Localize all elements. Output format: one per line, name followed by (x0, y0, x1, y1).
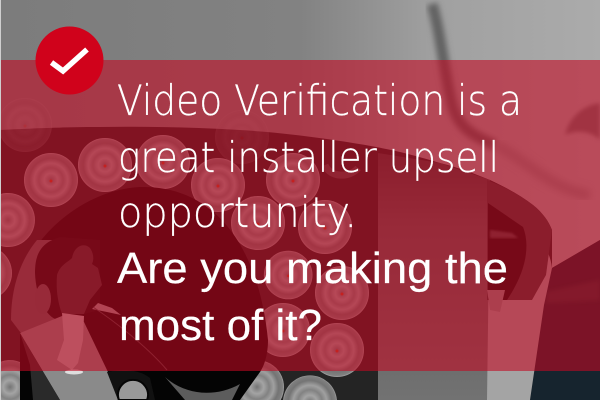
headline: most of it? (119, 301, 322, 350)
headline: opportunity. (118, 188, 357, 237)
headline: Are you making the (117, 244, 508, 293)
red translucent band (0, 60, 600, 371)
headline: Video Verification is a (117, 76, 522, 125)
icon: check mark badge (36, 26, 104, 94)
left edge highlight (0, 0, 1, 400)
headline: great installer upsell (118, 133, 499, 182)
headline (117, 76, 522, 350)
